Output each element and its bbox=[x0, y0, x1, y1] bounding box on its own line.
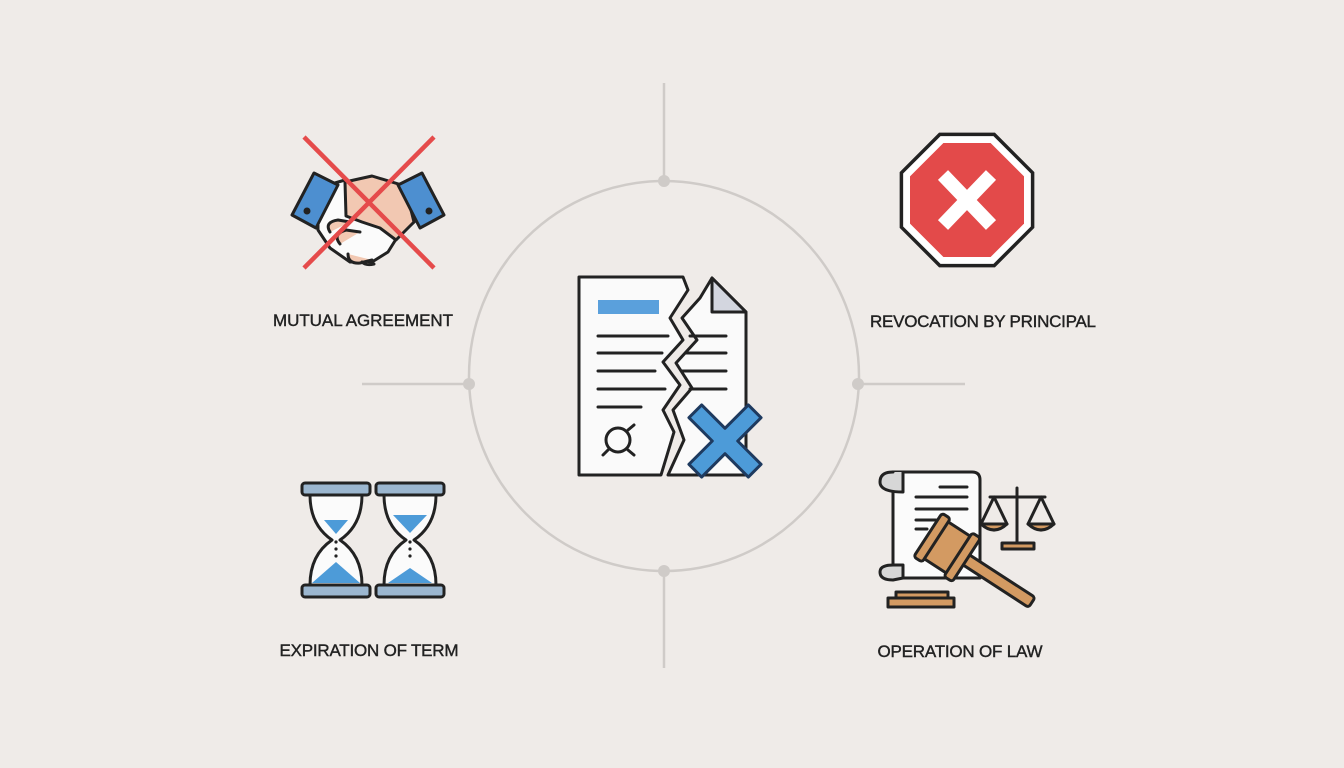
icon: torn contract bbox=[579, 277, 784, 500]
label: mutual agreement: MUTUAL AGREEMENT bbox=[273, 311, 453, 330]
icon: stop sign bbox=[901, 134, 1033, 266]
label: operation of law: OPERATION OF LAW bbox=[878, 642, 1042, 661]
label: revocation by principal: REVOCATION BY PRINCIPAL bbox=[870, 312, 1096, 331]
label: expiration of term: EXPIRATION OF TERM bbox=[280, 641, 458, 660]
central diagram frame bbox=[362, 83, 965, 668]
icon: hourglasses bbox=[302, 483, 444, 597]
icon: law scroll, gavel and scales bbox=[880, 472, 1054, 607]
icon: crossed handshake bbox=[292, 137, 444, 268]
